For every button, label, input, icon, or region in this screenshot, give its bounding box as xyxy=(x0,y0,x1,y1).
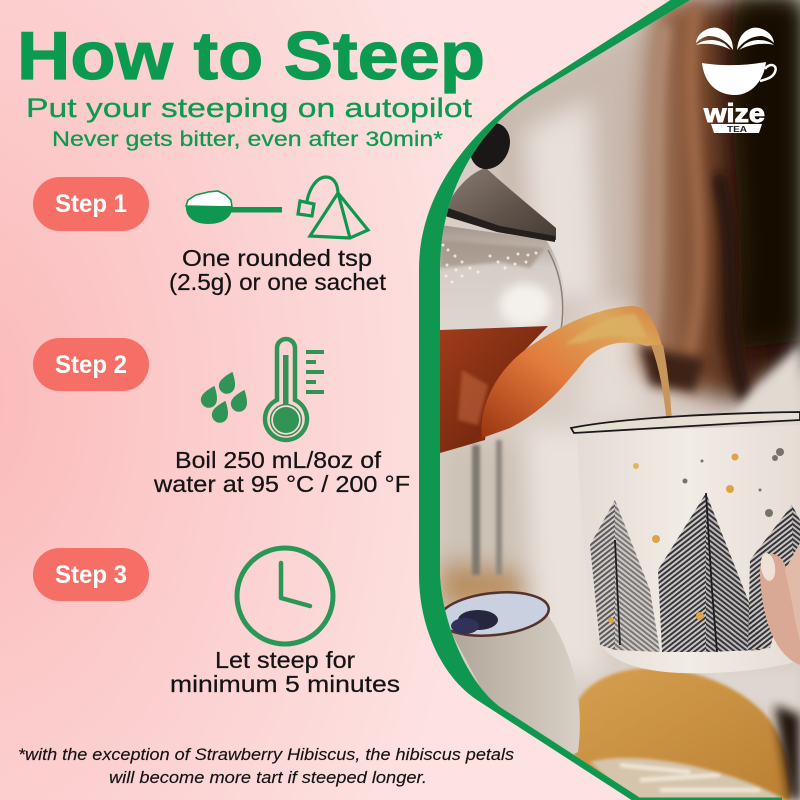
blurred stripes xyxy=(472,440,502,575)
icon: water drops xyxy=(198,369,252,425)
footnote: will become more tart if steeped longer. xyxy=(109,768,427,787)
blurred blouse xyxy=(440,20,660,680)
logo wordmark: wize xyxy=(703,98,765,128)
step 2 text: Boil 250 mL/8oz of xyxy=(175,447,382,473)
side bowl xyxy=(444,591,580,754)
lid and knob xyxy=(446,168,556,240)
step 3 xyxy=(33,548,400,697)
tree illustrations on mug xyxy=(590,493,800,652)
footnote: *with the exception of Strawberry Hibiscus, the hibiscus petals xyxy=(18,745,515,764)
spout xyxy=(481,306,662,438)
logo banner xyxy=(711,124,762,133)
footnote xyxy=(18,745,515,787)
step 2 xyxy=(33,338,410,497)
step 2 pill: Step 2 xyxy=(55,351,127,379)
logo leaves xyxy=(696,28,774,50)
tea stream xyxy=(651,345,672,416)
title: How to Steep xyxy=(17,18,485,94)
step 1 text xyxy=(169,245,387,295)
icon: tea sachet xyxy=(298,177,368,238)
steam bubbles on glass xyxy=(442,244,538,284)
step 3 text xyxy=(170,647,400,697)
basket xyxy=(590,758,785,800)
step 1 text: One rounded tsp xyxy=(182,245,372,271)
step 1 pill xyxy=(33,177,149,231)
subtitle: Put your steeping on autopilot xyxy=(26,93,473,123)
logo banner text: TEA xyxy=(727,124,747,134)
logo cup xyxy=(702,62,776,95)
step 1 text: (2.5g) or one sachet xyxy=(169,269,387,295)
icon: thermometer xyxy=(265,339,324,440)
icon: clock xyxy=(237,548,333,644)
subheading note: Never gets bitter, even after 30min* xyxy=(52,128,443,151)
step 2 text xyxy=(153,447,410,497)
step 3 text: Let steep for xyxy=(215,647,355,673)
sleeve and lower clothing xyxy=(732,342,800,426)
step 3 pill: Step 3 xyxy=(55,561,127,589)
mustard skirt xyxy=(570,668,792,800)
holding fingers xyxy=(760,554,800,665)
gold and grey speckles xyxy=(608,448,784,623)
logo: wize tea xyxy=(696,28,776,134)
hair xyxy=(635,0,800,400)
step 1 xyxy=(33,177,387,295)
tea in pot xyxy=(440,326,548,453)
teapot glass body xyxy=(440,225,564,345)
green curved band xyxy=(419,0,692,800)
step 1 pill: Step 1 xyxy=(55,190,127,218)
icon: measuring scoop xyxy=(186,191,282,224)
photo: pouring tea from a glass teapot into a mug xyxy=(420,0,800,800)
step 2 pill xyxy=(33,338,149,391)
step 3 pill xyxy=(33,548,149,601)
green bottom line xyxy=(640,798,782,800)
step 3 text: minimum 5 minutes xyxy=(170,671,400,697)
step 2 text: water at 95 °C / 200 °F xyxy=(153,471,410,497)
mug xyxy=(577,425,800,673)
